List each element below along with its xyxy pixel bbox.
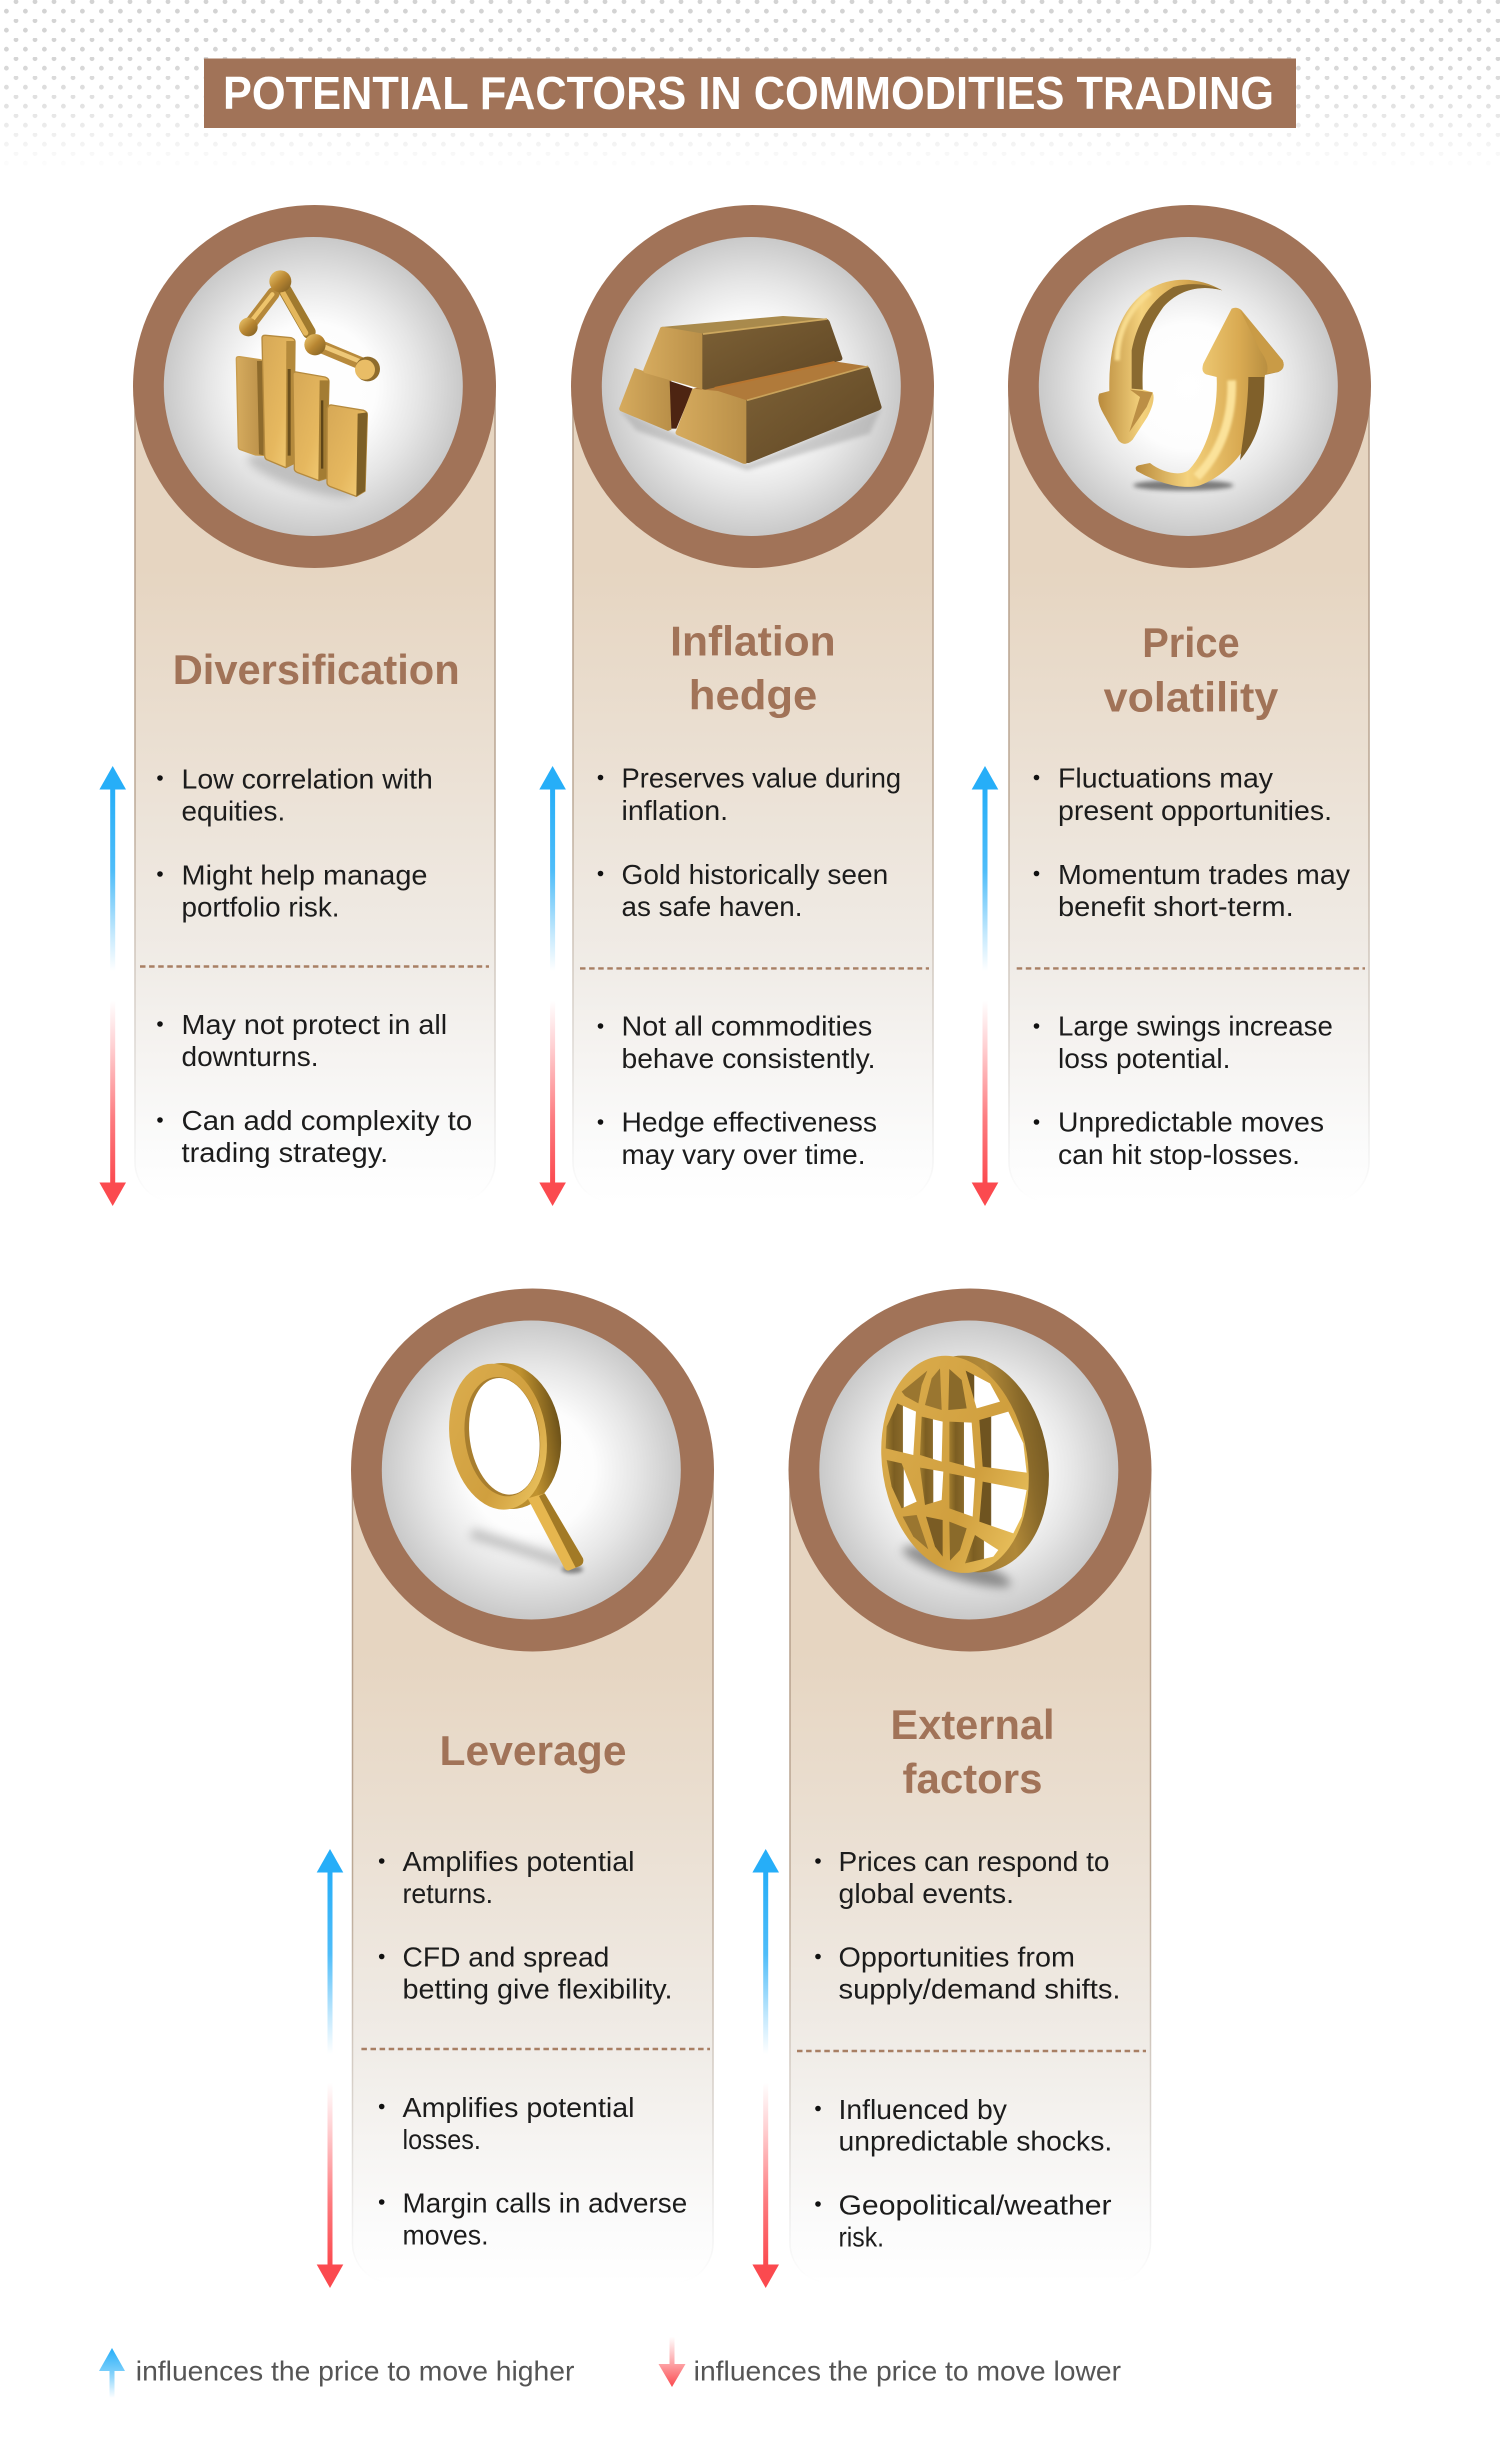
medallion ring <box>1008 205 1371 568</box>
arrow: up, Inflation hedge <box>539 766 566 971</box>
cons list <box>157 1009 472 1168</box>
pros list <box>815 1846 1120 2005</box>
cons list: Unpredictable moves <box>1058 1107 1324 1138</box>
icon: gold bars <box>619 316 882 470</box>
panel: Leverage <box>351 1288 714 2283</box>
arrow: down, Leverage <box>317 2083 343 2288</box>
arrow: down, Price volatility <box>972 1001 998 1206</box>
cons list: behave consistently. <box>622 1043 876 1074</box>
arrow: down, External factors <box>752 2083 779 2288</box>
pros list: equities. <box>182 795 285 826</box>
pros list: returns. <box>402 1878 493 1909</box>
panel: Inflation hedge <box>571 205 934 1202</box>
panel: External factors <box>788 1288 1152 2283</box>
cons list: Geopolitical/weather <box>838 2189 1112 2220</box>
medallion disc <box>819 1320 1118 1620</box>
icon: circular gold arrows <box>1098 280 1284 491</box>
heading <box>670 617 836 718</box>
cons list <box>598 1011 877 1170</box>
cons list: downturns. <box>182 1041 318 1072</box>
cons list: Large swings increase <box>1058 1011 1333 1042</box>
medallion disc <box>602 237 901 536</box>
pros list: Opportunities from <box>838 1942 1075 1973</box>
title banner: POTENTIAL FACTORS IN COMMODITIES TRADING <box>223 67 1274 119</box>
heading <box>1104 619 1279 720</box>
pros list <box>157 764 433 922</box>
cons list: may vary over time. <box>622 1139 866 1170</box>
cons list: Can add complexity to <box>182 1105 472 1136</box>
pros list: Gold historically seen <box>622 859 888 890</box>
icon: gold bar chart <box>236 270 380 506</box>
cons list <box>815 2094 1112 2252</box>
cons list: Amplifies potential <box>402 2092 634 2123</box>
pros list: Low correlation with <box>182 764 433 795</box>
cons list: loss potential. <box>1058 1043 1230 1074</box>
heading: External <box>890 1701 1054 1748</box>
heading: Inflation <box>670 617 836 664</box>
icon: legend up arrow <box>99 2348 125 2398</box>
heading: Diversification <box>173 646 460 693</box>
arrow: up, Price volatility <box>972 766 998 971</box>
pros list: Might help manage <box>182 860 428 890</box>
pros list: Amplifies potential <box>402 1846 634 1877</box>
pros list <box>598 763 901 922</box>
heading: hedge <box>689 672 817 718</box>
legend: price higher: influences the price to move higher <box>136 2356 574 2387</box>
pros list: benefit short-term. <box>1058 891 1294 922</box>
pros list: as safe haven. <box>622 891 802 922</box>
pros list: inflation. <box>622 795 728 826</box>
arrow: up, Leverage <box>317 1849 343 2054</box>
pros list: Fluctuations may <box>1058 763 1273 794</box>
medallion disc <box>1039 237 1338 536</box>
heading: Price <box>1142 619 1240 666</box>
icon: legend down arrow <box>658 2337 686 2387</box>
cons list: May not protect in all <box>182 1009 447 1040</box>
heading: volatility <box>1104 674 1279 720</box>
halftone dot band <box>0 0 1500 170</box>
pros list: betting give flexibility. <box>402 1974 672 2005</box>
icon: gold magnifying glass <box>440 1356 583 1573</box>
cons list: can hit stop-losses. <box>1058 1139 1300 1170</box>
cons list <box>1034 1011 1333 1170</box>
cons list: Not all commodities <box>622 1011 872 1042</box>
pros list: Prices can respond to <box>838 1846 1110 1877</box>
legend: price lower: influences the price to move lower <box>694 2356 1121 2387</box>
pros list <box>379 1846 672 2005</box>
panel: Diversification <box>133 205 496 1202</box>
cons list: Hedge effectiveness <box>622 1107 877 1138</box>
medallion ring <box>571 205 934 568</box>
legend: price higher <box>99 2348 574 2398</box>
heading: Leverage <box>440 1727 626 1774</box>
heading: factors <box>902 1755 1042 1802</box>
cons list: risk. <box>838 2221 884 2252</box>
cons list <box>379 2092 687 2250</box>
pros list: supply/demand shifts. <box>838 1974 1120 2005</box>
panel: Price volatility <box>1008 205 1371 1202</box>
medallion disc <box>164 237 463 536</box>
medallion ring <box>351 1288 714 1652</box>
legend: price lower <box>658 2337 1121 2387</box>
pros list <box>1034 763 1350 922</box>
icon: gold globe <box>866 1344 1064 1595</box>
cons list: Margin calls in adverse <box>402 2187 687 2218</box>
cons list: moves. <box>402 2219 488 2250</box>
pros list: Momentum trades may <box>1058 859 1350 890</box>
cons list: unpredictable shocks. <box>838 2125 1112 2156</box>
medallion ring <box>788 1288 1152 1652</box>
pros list: global events. <box>838 1878 1014 1909</box>
arrow: up, External factors <box>752 1849 779 2054</box>
cons list: Influenced by <box>838 2094 1007 2125</box>
heading <box>890 1701 1054 1802</box>
arrow: down, Diversification <box>99 1001 126 1206</box>
pros list: CFD and spread <box>402 1942 609 1973</box>
cons list: trading strategy. <box>182 1137 388 1168</box>
arrow: down, Inflation hedge <box>539 1001 566 1206</box>
medallion disc <box>382 1320 681 1620</box>
pros list: Preserves value during <box>622 763 901 794</box>
medallion ring <box>133 205 496 568</box>
pros list: portfolio risk. <box>182 891 340 922</box>
cons list: losses. <box>402 2124 481 2155</box>
pros list: present opportunities. <box>1058 795 1332 826</box>
arrow: up, Diversification <box>99 766 126 971</box>
